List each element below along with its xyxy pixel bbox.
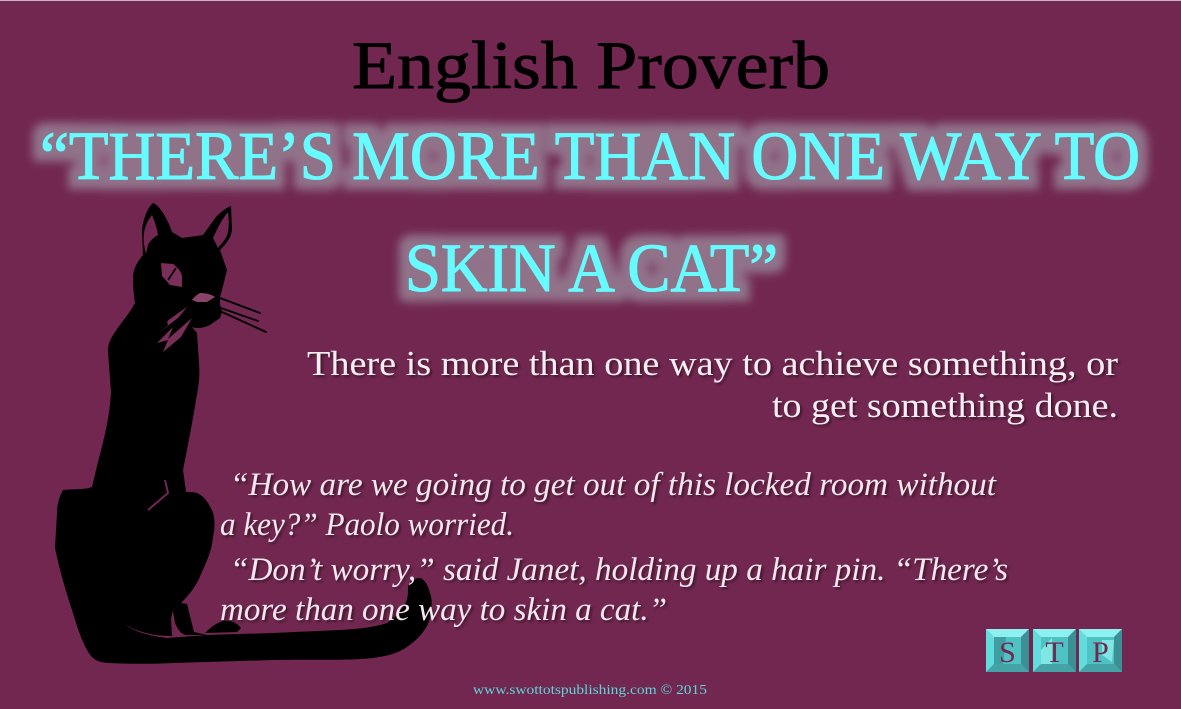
cat ear inners: [144, 215, 158, 254]
proverb headline: “THERE’S MORE THAN ONE WAY TO: [40, 118, 1140, 194]
cat nose: [192, 293, 215, 302]
meaning text: [307, 344, 1118, 425]
example dialogue: [220, 467, 1008, 628]
cat rear paw: [205, 621, 241, 633]
meaning text: to get something done.: [772, 386, 1118, 425]
tile T: T: [1045, 636, 1064, 669]
footer credit: www.swottotspublishing.com © 2015: [473, 682, 707, 697]
example dialogue: “Don’t worry,” said Janet, holding up a hair pin. “There’s: [230, 552, 1008, 588]
logo: STP tiles: [986, 629, 1122, 672]
meaning text: There is more than one way to achieve something, or: [307, 344, 1118, 383]
title: English Proverb: [352, 27, 830, 103]
cat left whisker marks: [157, 307, 192, 352]
cat leg creases: [148, 480, 168, 510]
tile S: S: [999, 636, 1016, 669]
example dialogue: more than one way to skin a cat.”: [220, 592, 667, 628]
proverb headline: SKIN A CAT”: [405, 230, 778, 306]
cat eye: [161, 263, 182, 287]
tile P: P: [1092, 636, 1109, 669]
cat right whiskers: [218, 298, 266, 332]
example dialogue: a key?” Paolo worried.: [220, 507, 514, 543]
icon: black cat silhouette: [55, 203, 432, 664]
proverb headline: [40, 118, 1140, 306]
example dialogue: “How are we going to get out of this locked room without: [230, 467, 997, 503]
